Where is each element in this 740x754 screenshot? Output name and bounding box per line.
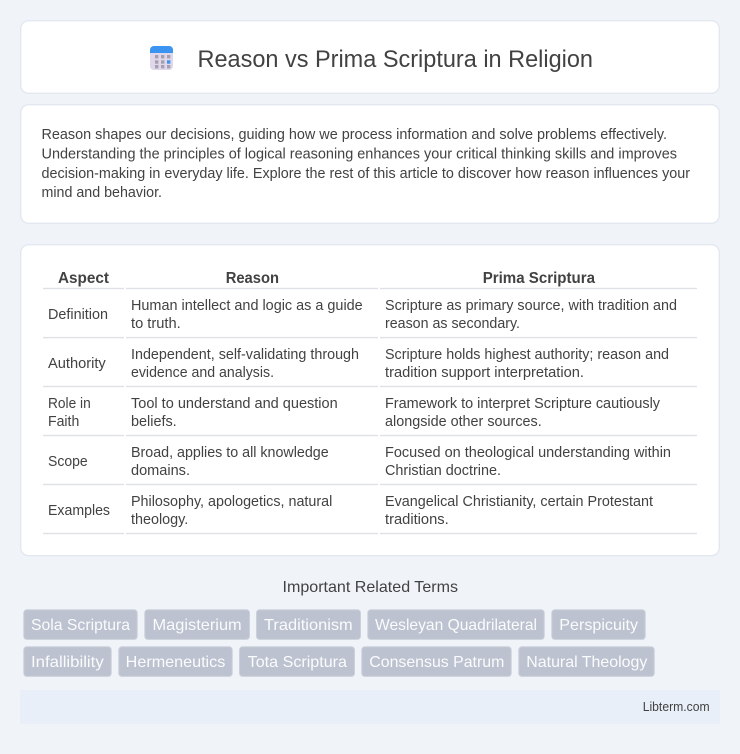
panel: comparison table [21,245,719,556]
table row: examples: theology. [131,512,188,528]
table row: definition: Definition [48,307,108,323]
table header row: Prima Scriptura [483,270,595,287]
text block: introduction paragraph [42,127,690,201]
table row: authority: Scripture holds highest authority; reason and [385,347,669,363]
text block: introduction paragraph: Understanding the principles of logical reasoning enhances your critical thinking skills and improves [42,147,677,163]
table row: role in faith: beliefs. [131,414,177,430]
table header row [58,270,595,287]
table row: definition: Human intellect and logic as a guide [131,298,363,314]
table row: authority [48,347,669,381]
related term tags: Infallibility [31,654,104,671]
table header row: Reason [226,270,279,287]
related term tags: Hermeneutics [126,654,225,671]
related term tags: Natural Theology [526,654,647,671]
table row: role in faith: Faith [48,414,79,430]
table row: definition: Scripture as primary source, with tradition and [385,298,677,314]
related term tags: Perspicuity [559,617,638,634]
title: Reason vs Prima Scriptura in Religion [198,46,593,73]
table row: role in faith: Tool to understand and question [131,396,338,412]
table row: scope: domains. [131,463,190,479]
related term tags [24,610,654,676]
table row: scope: Christian doctrine. [385,463,501,479]
table row: role in faith: Framework to interpret Scripture cautiously [385,396,661,412]
table row: examples [48,494,653,528]
table row: scope: Broad, applies to all knowledge [131,445,329,461]
related term tags: Traditionism [264,617,353,634]
table row: scope: Focused on theological understanding within [385,445,671,461]
heading: important related terms: Important Related Terms [282,579,458,596]
panel: introduction [21,105,719,223]
related term tags: Consensus Patrum [369,654,504,671]
table row: examples: Examples [48,503,110,519]
table row: role in faith: Role in [48,396,91,412]
table row: definition: to truth. [131,316,181,332]
text block: introduction paragraph: Reason shapes our decisions, guiding how we process information and solve problems effectively. [42,127,667,143]
table row: authority: tradition support interpretation. [385,365,584,381]
footer bar [20,690,720,724]
table row: examples: Evangelical Christianity, certain Protestant [385,494,653,510]
related term tags: Sola Scriptura [31,617,130,634]
table row: examples: Philosophy, apologetics, natural [131,494,332,510]
table row: authority: evidence and analysis. [131,365,274,381]
table row: role in faith [48,396,661,430]
related term tags: Tota Scriptura [248,654,347,671]
text block: introduction paragraph: mind and behavior. [42,185,162,201]
table row: scope [48,445,671,479]
panel: title card [21,21,719,93]
related term tags: Magisterium [152,617,242,634]
table row: authority: Independent, self-validating through [131,347,359,363]
text block: introduction paragraph: decision-making in everyday life. Explore the rest of this article to discover how reason influences your [42,166,690,182]
table row: scope: Scope [48,454,88,470]
table row: role in faith: alongside other sources. [385,414,542,430]
table row: examples: traditions. [385,512,449,528]
table row: definition [48,298,677,332]
related term tags: Wesleyan Quadrilateral [375,617,537,634]
icon: calendar [150,46,173,70]
table row: definition: reason as secondary. [385,316,520,332]
footer credit: Libterm.com [643,700,710,714]
table header row: Aspect [58,270,110,287]
table row: authority: Authority [48,356,107,372]
